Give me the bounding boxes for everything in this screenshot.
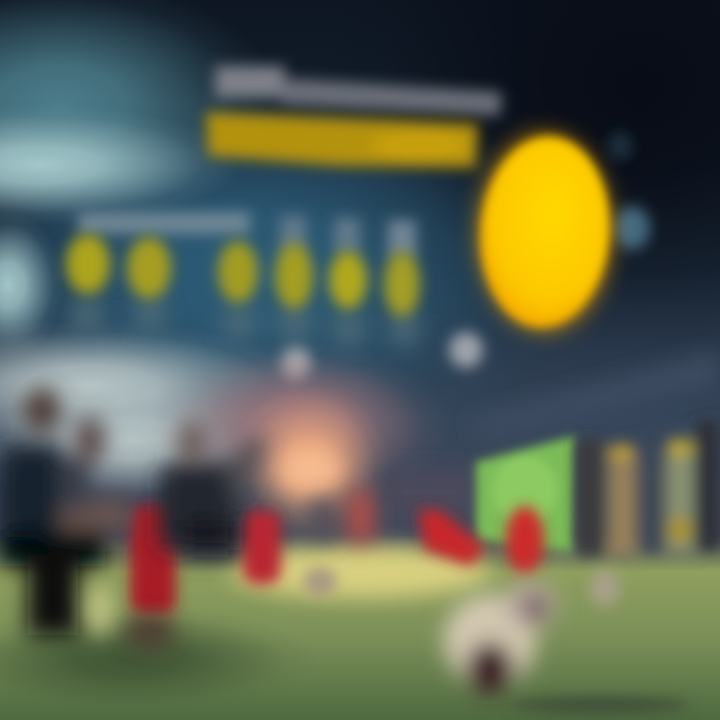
centre player group: [160, 422, 268, 550]
stat circle 5: [329, 251, 367, 344]
football foreground: [444, 581, 556, 694]
title: yellow heading band: [206, 112, 478, 168]
stat circle 6: [384, 251, 420, 344]
striped columns at right: [576, 420, 720, 556]
stat circle 2: [127, 237, 171, 330]
red kit 5: [506, 506, 544, 574]
red kit 1: [130, 505, 176, 615]
small pale markers: [281, 132, 650, 381]
row of yellow stat circles: [66, 234, 420, 344]
background crowd band: [180, 470, 475, 560]
small distant footballs: [303, 567, 620, 606]
red flags and kits: [130, 490, 544, 615]
subtitle band: [78, 212, 416, 258]
stadium glow: [150, 340, 450, 545]
grass pitch: [0, 535, 720, 720]
player boots shadow: [124, 616, 176, 648]
stat circle 1: [66, 234, 110, 330]
stat circle 4: [275, 243, 313, 338]
large yellow coin: [475, 132, 615, 332]
light patch by the legs: [88, 584, 112, 636]
title: grey heading line: [215, 66, 502, 116]
red kit 3: [348, 490, 374, 544]
green panel: [476, 436, 575, 552]
red kit 2: [243, 510, 281, 584]
silhouette players: [0, 388, 268, 648]
front player: [0, 388, 130, 635]
stat circle 3: [218, 241, 258, 338]
red kit 4: [418, 510, 486, 566]
